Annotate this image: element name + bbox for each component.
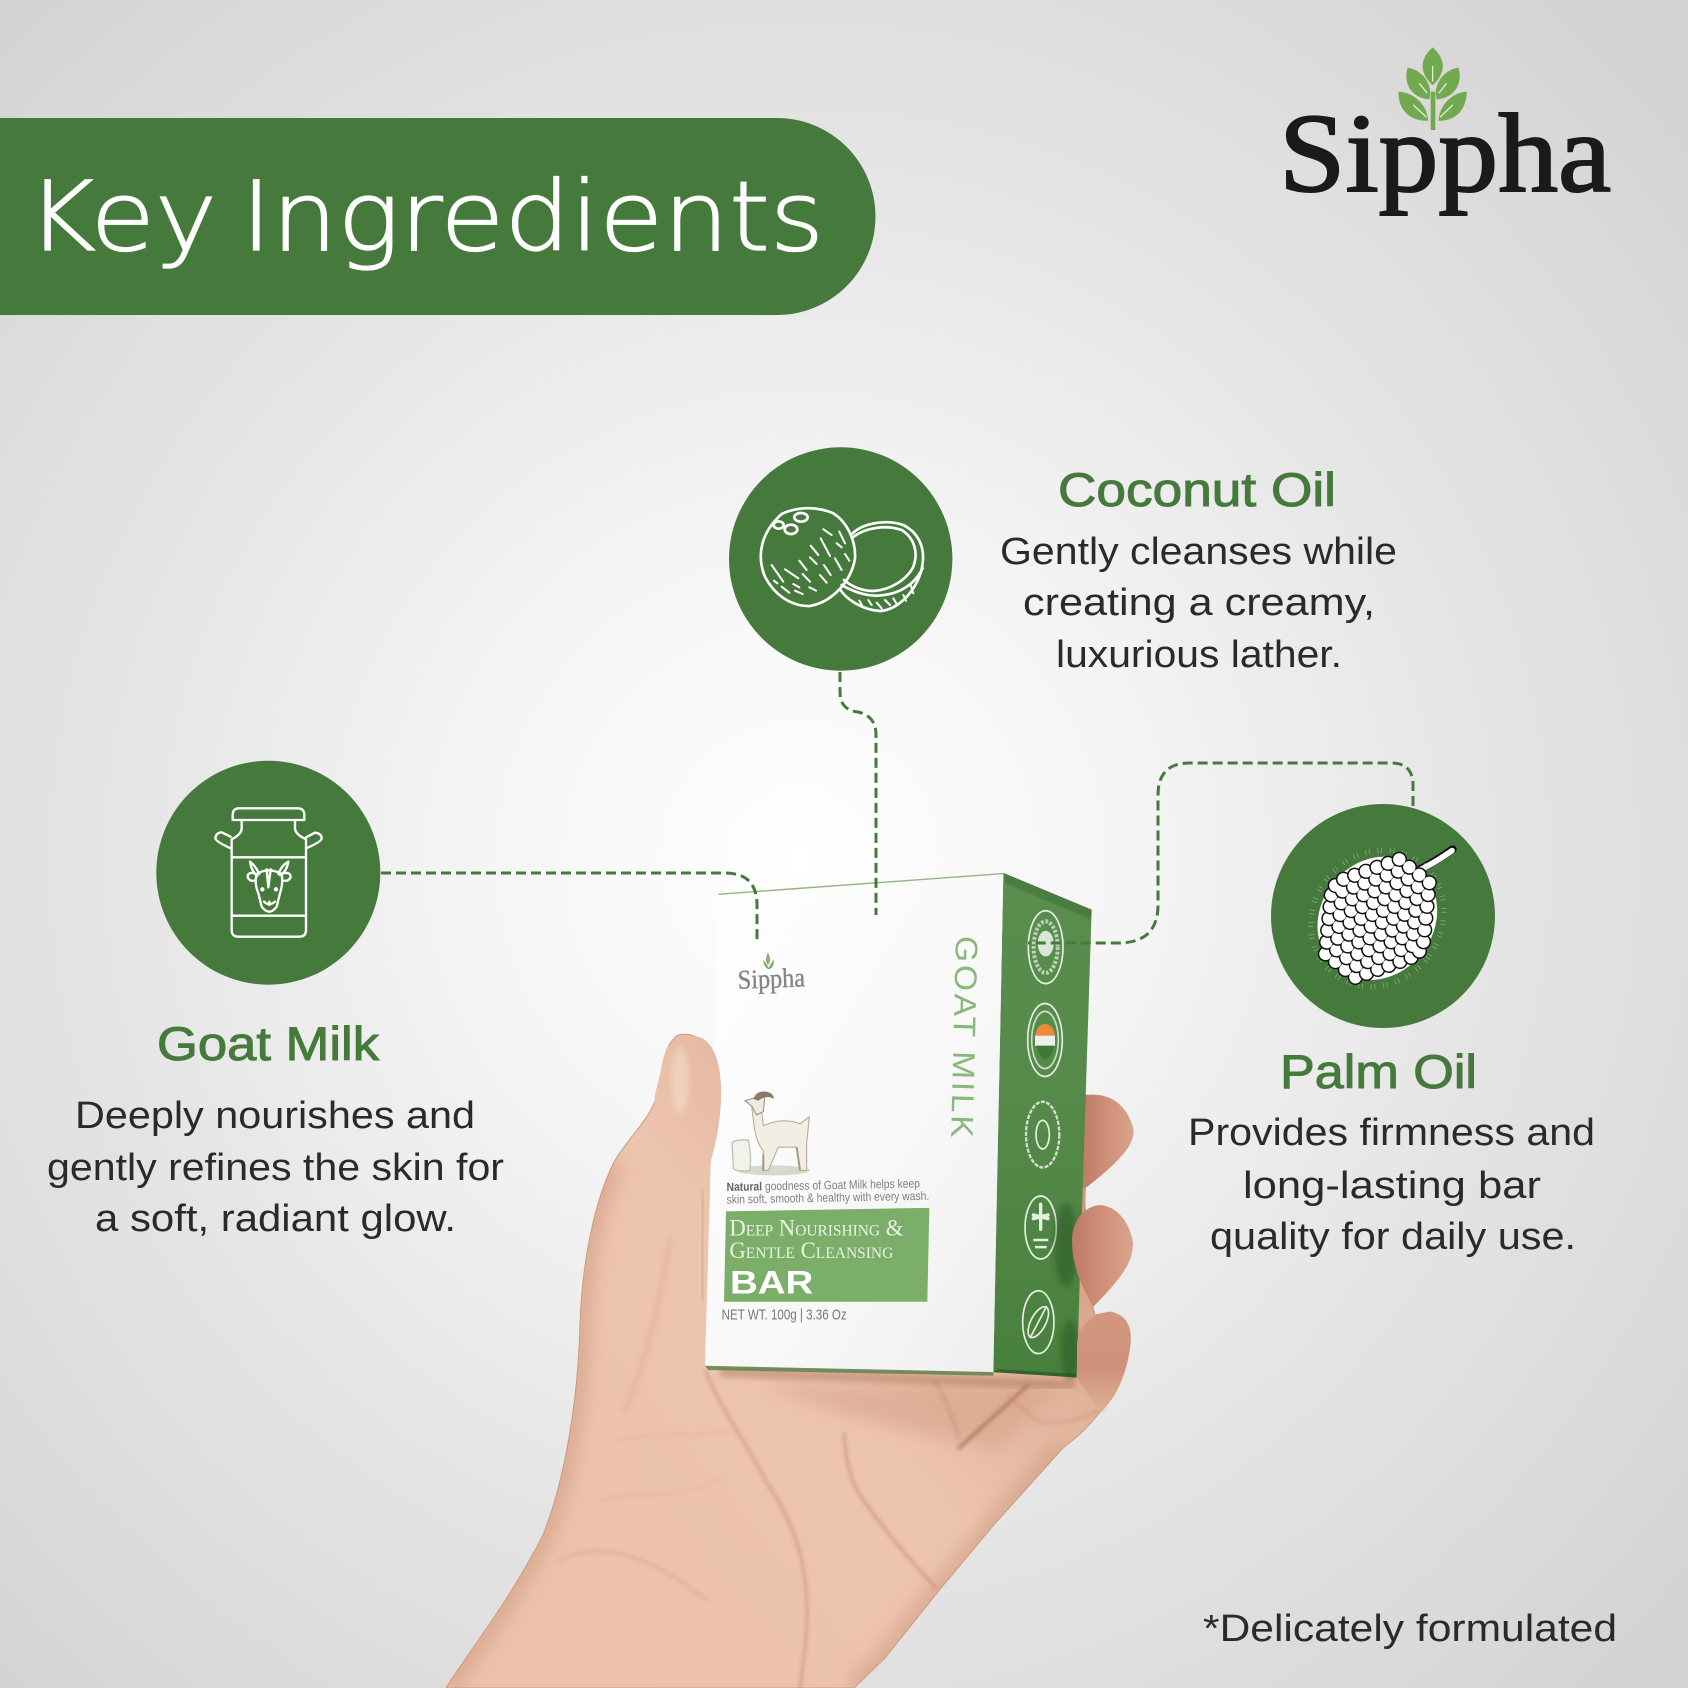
box net weight: NET WT. 100g | 3.36 Oz: [722, 1307, 847, 1323]
thumb over box: [650, 1036, 721, 1300]
footnote: *Delicately formulated: [1203, 1608, 1617, 1650]
box tagline: [726, 1177, 929, 1207]
box green label: Deep Nourishing &: [729, 1215, 903, 1241]
description: palm oil: long-lasting bar: [1243, 1165, 1541, 1207]
heading: goat milk: Goat Milk: [157, 1017, 380, 1070]
palm oil panel: [1188, 804, 1595, 1258]
description: goat milk: [47, 1095, 504, 1240]
finger behind box: [1080, 1095, 1134, 1190]
title text: Ingredients: [241, 161, 824, 273]
box side panel: [993, 873, 1092, 1377]
icon circle: goat milk can: [156, 761, 380, 985]
description: palm oil: [1188, 1112, 1595, 1258]
connector: coconut oil to box: [840, 672, 876, 915]
description: coconut oil: Gently cleanses while: [1000, 531, 1397, 573]
box green label: BAR: [730, 1264, 813, 1301]
description: coconut oil: [1000, 531, 1397, 676]
icon circle: palm fruit: [1271, 804, 1495, 1028]
connector: palm oil to box: [1028, 763, 1413, 943]
description: goat milk: gently refines the skin for: [47, 1147, 504, 1189]
title text: Key: [27, 161, 217, 273]
logo wordmark: Sippha: [1279, 92, 1611, 216]
description: palm oil: quality for daily use.: [1210, 1216, 1576, 1258]
box product name: GOAT MILK: [944, 936, 984, 1139]
heading: coconut oil: Coconut Oil: [1058, 463, 1336, 516]
goat milk panel: [47, 761, 504, 1240]
certification badges: [1023, 911, 1063, 1354]
description: goat milk: a soft, radiant glow.: [95, 1198, 456, 1240]
icon circle: coconut: [729, 447, 952, 671]
description: palm oil: Provides firmness and: [1188, 1112, 1595, 1154]
title text: [27, 161, 824, 273]
description: coconut oil: luxurious lather.: [1056, 634, 1342, 676]
icon: india flag badge: [1035, 1024, 1055, 1059]
box tagline: skin soft, smooth & healthy with every wash.: [726, 1189, 929, 1207]
brand logo: [1279, 47, 1611, 216]
box green label: [724, 1208, 929, 1302]
coconut oil panel: [729, 447, 1397, 676]
connector: goat milk to box: [381, 873, 757, 942]
description: coconut oil: creating a creamy,: [1023, 582, 1375, 624]
hand holding the product: [446, 1034, 1134, 1688]
product box: [705, 873, 1092, 1377]
heading: palm oil: Palm Oil: [1280, 1045, 1477, 1098]
box green label: Gentle Cleansing: [729, 1237, 893, 1263]
fingers over box: [1072, 1205, 1133, 1412]
shadows of fingers on box: [1054, 1203, 1079, 1380]
box front panel: [705, 873, 1003, 1376]
title banner: [0, 118, 875, 315]
description: goat milk: Deeply nourishes and: [75, 1095, 475, 1137]
goat illustration: [732, 1091, 810, 1175]
box logo: Sippha: [737, 963, 806, 995]
box tagline: Natural goodness of Goat Milk helps keep: [726, 1177, 920, 1194]
icon: logo leaves: [1398, 47, 1467, 130]
